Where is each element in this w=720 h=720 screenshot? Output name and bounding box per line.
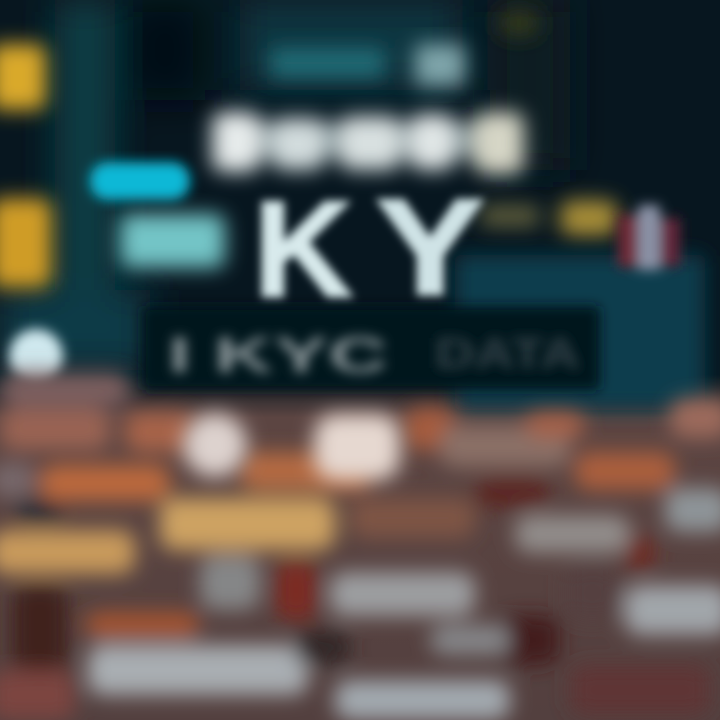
panel: teal block at right bbox=[455, 255, 705, 410]
label: pale teal pill bbox=[120, 214, 225, 268]
icon: two pale round shapes bbox=[183, 413, 400, 480]
caption: blurred small text bbox=[168, 327, 580, 383]
heading: top blurred line bbox=[270, 44, 465, 86]
icon: yellow lights at left bbox=[0, 10, 618, 288]
title: KY letters: Y bbox=[376, 171, 484, 323]
background: teal columns bbox=[0, 0, 570, 370]
caption: blurred small text: I KYC bbox=[168, 327, 388, 383]
panel: dark caption bar bbox=[142, 306, 600, 390]
icon: round light at left bbox=[9, 329, 63, 383]
title: KY letters bbox=[254, 171, 484, 325]
lower scene: tiled orange, red and grey shapes bbox=[0, 372, 720, 720]
icon: small flag bbox=[618, 205, 680, 270]
title: KY letters: K bbox=[254, 173, 352, 325]
caption: blurred small text: DATA bbox=[435, 329, 580, 378]
label: cyan pill bbox=[90, 162, 190, 200]
heading: second blurred line bbox=[212, 112, 524, 174]
